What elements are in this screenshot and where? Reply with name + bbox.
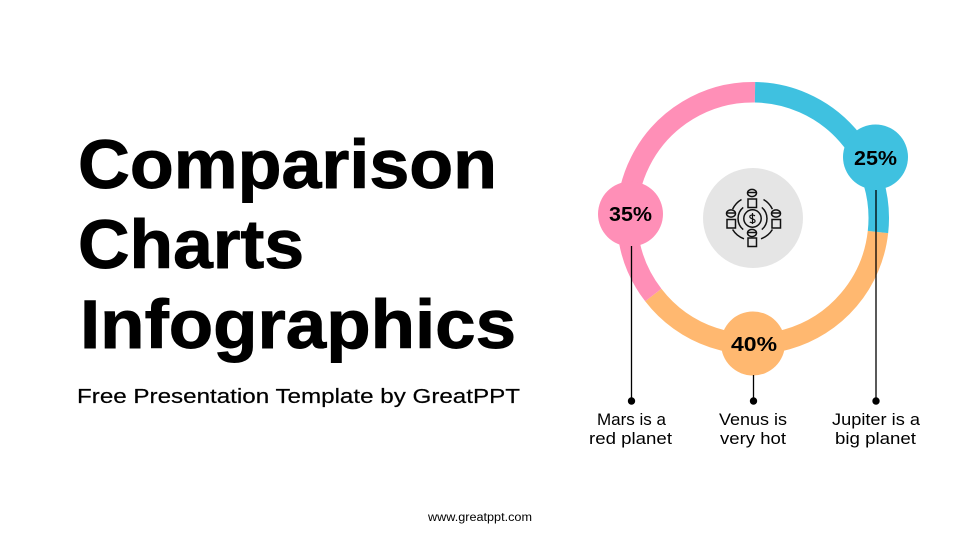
subtitle: Free Presentation Template by GreatPPT: [77, 386, 520, 408]
leader line: Jupiter: [872, 190, 880, 405]
label: Mars: Mars is a: [597, 411, 667, 429]
leader line: Mars: [628, 246, 635, 405]
ring segment: pink 35%: [627, 92, 755, 295]
callout: 25%: [843, 124, 908, 190]
callout: 35%: [598, 182, 663, 246]
label: Venus: very hot: [720, 430, 786, 448]
footer url: www.greatppt.com: [427, 512, 532, 524]
donut chart: [627, 92, 879, 344]
label: Mars: red planet: [589, 430, 672, 448]
callout: 25%: 25%: [854, 148, 897, 170]
icon: people around coin: [726, 189, 780, 246]
title: [78, 126, 516, 363]
center circle: [703, 168, 803, 268]
label: Venus: Venus is: [719, 411, 787, 429]
ring segment: blue 25%: [755, 92, 879, 232]
callout: 40%: [721, 312, 785, 376]
callout: 40%: 40%: [731, 334, 777, 356]
ring segment: orange 40%: [653, 232, 878, 344]
label: Venus: [719, 411, 787, 448]
label: Jupiter: [832, 411, 921, 448]
leader line: Venus: [750, 375, 757, 405]
title: Infographics: [80, 286, 516, 363]
label: Mars: [589, 411, 672, 448]
label: Jupiter: big planet: [835, 430, 916, 448]
title: Charts: [78, 206, 304, 283]
label: Jupiter: Jupiter is a: [832, 411, 921, 429]
callout: 35%: 35%: [609, 204, 652, 226]
title: Comparison: [78, 126, 497, 203]
